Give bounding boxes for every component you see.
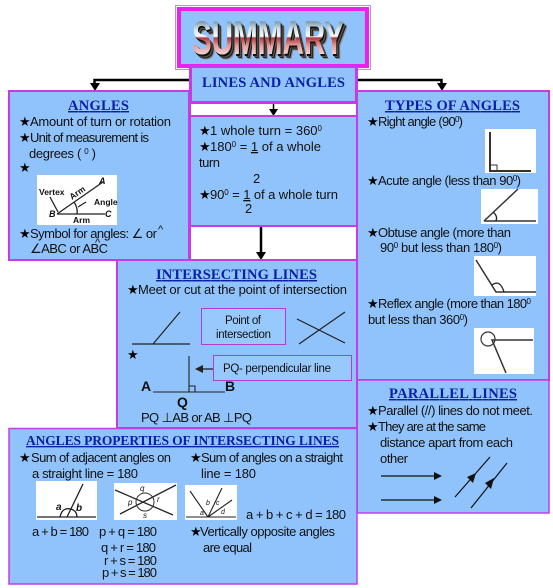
turn facts: ★ <box>199 124 211 139</box>
right angle <box>367 114 536 173</box>
diagram: vertex and arms: Arm <box>67 183 87 202</box>
turn facts: 1 whole turn = 360 <box>210 123 318 138</box>
diagram: four angles on a line: b <box>206 500 210 507</box>
callout: point of intersection: intersection <box>216 329 271 341</box>
adjacent angles text: Sum of adjacent angles on <box>31 450 171 465</box>
parallel arrows <box>381 457 507 508</box>
turn facts: 0 <box>318 124 323 133</box>
right angle: Right angle (90 <box>378 114 456 129</box>
panel: lower connector band <box>190 226 357 260</box>
acute angle: 0 <box>513 174 518 183</box>
diagram: crossing angles: p <box>127 498 133 507</box>
equations: adjacent <box>32 524 157 580</box>
heading: angle properties: ANGLES PROPERTIES OF INTERSECTING LINES <box>26 433 339 448</box>
angles bullets: ★ <box>19 161 31 176</box>
title: SUMMARY <box>192 11 348 69</box>
turn facts: 2 <box>253 171 260 186</box>
heading: intersecting lines: INTERSECTING LINES <box>156 267 317 283</box>
turn facts: = 1 of a whole <box>240 139 321 154</box>
diagram: vertex and arms: A <box>98 176 106 186</box>
diagram: vertex and arms: C <box>105 209 112 219</box>
parallel text: ★ <box>367 404 379 419</box>
turn facts: 180 <box>210 139 232 154</box>
angles bullets <box>19 114 171 176</box>
obtuse angle: Obtuse angle (more than <box>378 225 511 240</box>
title: SUMMARY: SUMMARY <box>193 13 345 66</box>
diagram: crossing angles: s <box>143 511 147 520</box>
diagram: vertex and arms: B <box>49 209 56 219</box>
straight line angles text: line = 180 <box>201 466 256 481</box>
callout: perpendicular line: PQ- perpendicular line <box>223 363 331 375</box>
equation: four angles: a + b + c + d = 180 <box>246 507 346 522</box>
panel: whole turn <box>190 116 357 226</box>
turn facts: 0 <box>224 188 229 197</box>
adjacent angles text: a straight line = 180 <box>32 466 138 481</box>
diagram: adjacent angles: a <box>56 502 62 513</box>
parallel text: Parallel (//) lines do not meet. <box>378 403 533 418</box>
panel: intersecting lines <box>117 260 357 428</box>
reflex angle: ★ <box>367 297 379 312</box>
title box <box>176 6 370 70</box>
right angle: ) <box>459 114 463 129</box>
parallel text: distance apart from each <box>380 435 513 450</box>
vertically opposite text: Vertically opposite angles <box>200 524 336 539</box>
angles bullets: ★ <box>19 131 31 146</box>
parallel text: other <box>380 451 409 466</box>
diagram: perpendicular lines <box>141 356 235 410</box>
obtuse angle: ) <box>498 240 502 255</box>
obtuse angle: ★ <box>367 226 379 241</box>
turn facts: 0 <box>232 140 237 149</box>
panel: lines and angles <box>190 66 357 103</box>
angles bullets: Amount of turn or rotation <box>30 114 171 129</box>
diagram: crossing angles: q <box>140 484 145 493</box>
obtuse angle: but less than 180 <box>398 240 494 255</box>
diagram: perpendicular lines: A <box>141 378 151 394</box>
callout: perpendicular line <box>214 356 352 380</box>
right angle: ★ <box>367 115 379 130</box>
straight line angles text <box>190 450 343 481</box>
diagram: crossing lines <box>297 312 345 344</box>
obtuse angle: 90 <box>380 240 394 255</box>
diagram: vertex and arms: Arm <box>73 215 90 225</box>
acute angle: Acute angle (less than 90 <box>378 173 513 188</box>
straight line angles text: Sum of angles on a straight <box>201 450 343 465</box>
adjacent angles text: ★ <box>19 451 31 466</box>
title: SUMMARY: SUMMARY <box>194 14 346 67</box>
turn facts: 90 <box>210 187 224 202</box>
callout: point of intersection <box>202 308 286 344</box>
callout: point of intersection: Point of <box>225 315 262 327</box>
equations: adjacent: a + b = 180 <box>32 524 89 539</box>
diagram: line meets line <box>132 312 190 344</box>
diagram: four angles on a line: d <box>221 509 226 516</box>
obtuse angle: 0 <box>394 241 399 250</box>
diagram: perpendicular lines: B <box>225 378 235 394</box>
diagram: vertex and arms <box>37 175 118 225</box>
diagram: four angles on a line <box>185 485 237 520</box>
reflex angle: Reflex angle (more than 180 <box>378 296 527 311</box>
turn facts: turn <box>199 155 220 170</box>
straight line angles text: ★ <box>190 451 202 466</box>
reflex angle: 0 <box>460 313 465 322</box>
arrow: down large <box>256 227 266 260</box>
reflex angle <box>367 296 534 374</box>
diagram: perpendicular lines: Q <box>177 394 188 410</box>
angles bullets: ★ <box>19 115 31 130</box>
adjacent angles text <box>19 450 171 481</box>
heading: lines and angles: LINES AND ANGLES <box>202 75 345 91</box>
panel: angles <box>9 91 189 260</box>
diagram: four angles on a line: c <box>216 500 220 507</box>
turn facts: 2 <box>245 201 252 216</box>
arrowhead: to angles <box>90 83 100 91</box>
parallel text: ★ <box>367 420 379 435</box>
meet or cut text: ★ <box>127 283 139 298</box>
acute angle: ) <box>517 173 521 188</box>
title: SUMMARY: SUMMARY <box>196 16 348 69</box>
arrow: down small <box>269 104 278 116</box>
angles bullets: ) <box>88 146 96 161</box>
panel: angle properties <box>9 428 357 584</box>
angles bullets: 0 <box>84 147 89 156</box>
symbol for angles text: ^ <box>95 237 101 249</box>
symbol for angles text <box>19 224 164 256</box>
turn facts: ★ <box>199 188 211 203</box>
vertically opposite text: ★ <box>190 525 202 540</box>
right angle: 0 <box>455 115 460 124</box>
vertically opposite text: are equal <box>203 540 252 555</box>
equations: adjacent: p + s = 180 <box>102 565 157 580</box>
arrow: to angles <box>94 80 190 84</box>
meet or cut text: Meet or cut at the point of intersection <box>138 282 347 297</box>
arrow: to perpendicular callout <box>195 365 213 373</box>
equations: adjacent: q + r = 180 <box>101 540 156 555</box>
diagram: four angles on a line: a <box>200 510 204 517</box>
angles bullets: degrees ( <box>29 146 81 161</box>
obtuse angle <box>367 225 536 296</box>
acute angle <box>367 173 538 224</box>
diagram: vertex and arms: Vertex <box>39 187 65 197</box>
arrow: to types of angles <box>357 80 442 84</box>
parallel text <box>367 403 533 466</box>
reflex angle: ) <box>464 312 468 327</box>
turn facts: ★ <box>199 140 211 155</box>
symbol for angles text: ^ <box>158 224 164 236</box>
turn facts: = 1 of a whole turn <box>232 187 338 202</box>
diagram: crossing angles <box>114 483 177 520</box>
equations: adjacent: p + q = 180 <box>99 524 157 539</box>
symbol for angles text: Symbol for angles: ∠ or <box>30 226 158 241</box>
angles bullets: Unit of measurement is <box>30 130 150 145</box>
diagram: adjacent angles: b <box>76 503 82 514</box>
panel: connector band <box>190 103 357 116</box>
arrowhead: to types <box>437 83 447 91</box>
obtuse angle: 0 <box>494 241 499 250</box>
heading: types of angles: TYPES OF ANGLES <box>385 98 520 114</box>
title: SUMMARY: SUMMARY <box>192 11 344 64</box>
panel: types of angles <box>357 91 549 380</box>
diagram: vertex and arms: Angle <box>94 197 118 207</box>
star bullet: ★ <box>127 348 139 363</box>
heading: angles: ANGLES <box>68 98 129 114</box>
reflex angle: but less than 360 <box>368 312 460 327</box>
heading: parallel lines: PARALLEL LINES <box>389 386 517 402</box>
acute angle: ★ <box>367 174 379 189</box>
parallel text: They are at the same <box>378 419 486 434</box>
vertically opposite text <box>190 524 336 555</box>
reflex angle: 0 <box>527 297 532 306</box>
diagram: crossing angles: r <box>157 495 160 504</box>
panel: parallel lines <box>357 380 549 513</box>
perpendicular notation: PQ ⊥AB or AB ⊥PQ <box>141 410 252 425</box>
title: SUMMARY: SUMMARY <box>195 15 347 68</box>
symbol for angles text: ∠ABC or ABC <box>30 241 108 256</box>
turn facts <box>199 123 338 216</box>
diagram: adjacent angles <box>36 481 97 520</box>
equations: adjacent: r + s = 180 <box>104 553 157 568</box>
symbol for angles text: ★ <box>19 227 31 242</box>
